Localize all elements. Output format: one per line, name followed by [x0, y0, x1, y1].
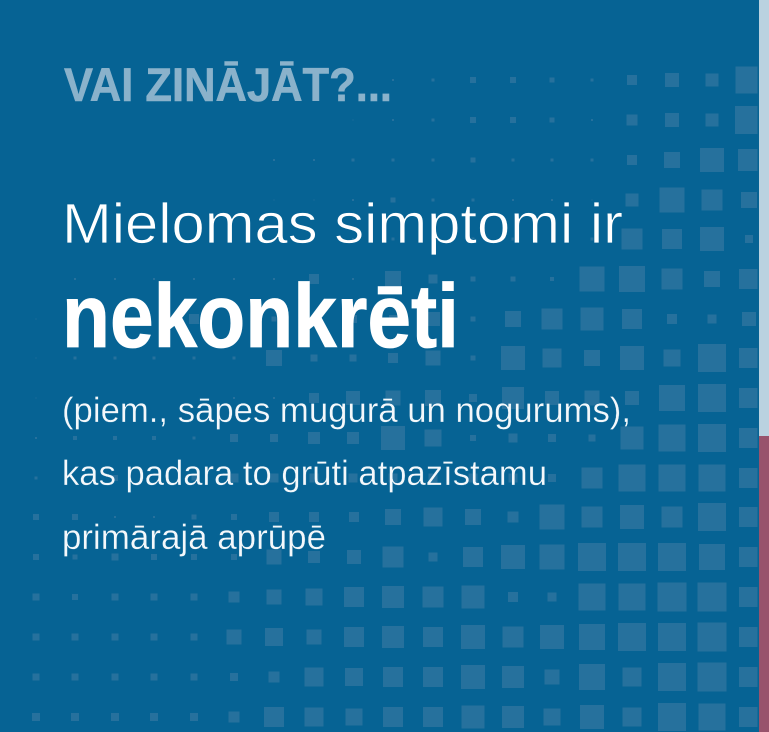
- title: VAI ZINĀJĀT?...: VAI ZINĀJĀT?...: [64, 58, 392, 111]
- body text line 1: (piem., sāpes mugurā un nogurums),: [62, 391, 631, 430]
- headline: emphasised word: nekonkrēti: [62, 267, 459, 367]
- body text line 2: kas padara to grūti atpazīstamu: [62, 454, 547, 493]
- right edge colour bar: [759, 0, 769, 732]
- headline: first line: Mielomas simptomi ir: [62, 192, 623, 256]
- body text line 3: primārajā aprūpē: [62, 518, 326, 557]
